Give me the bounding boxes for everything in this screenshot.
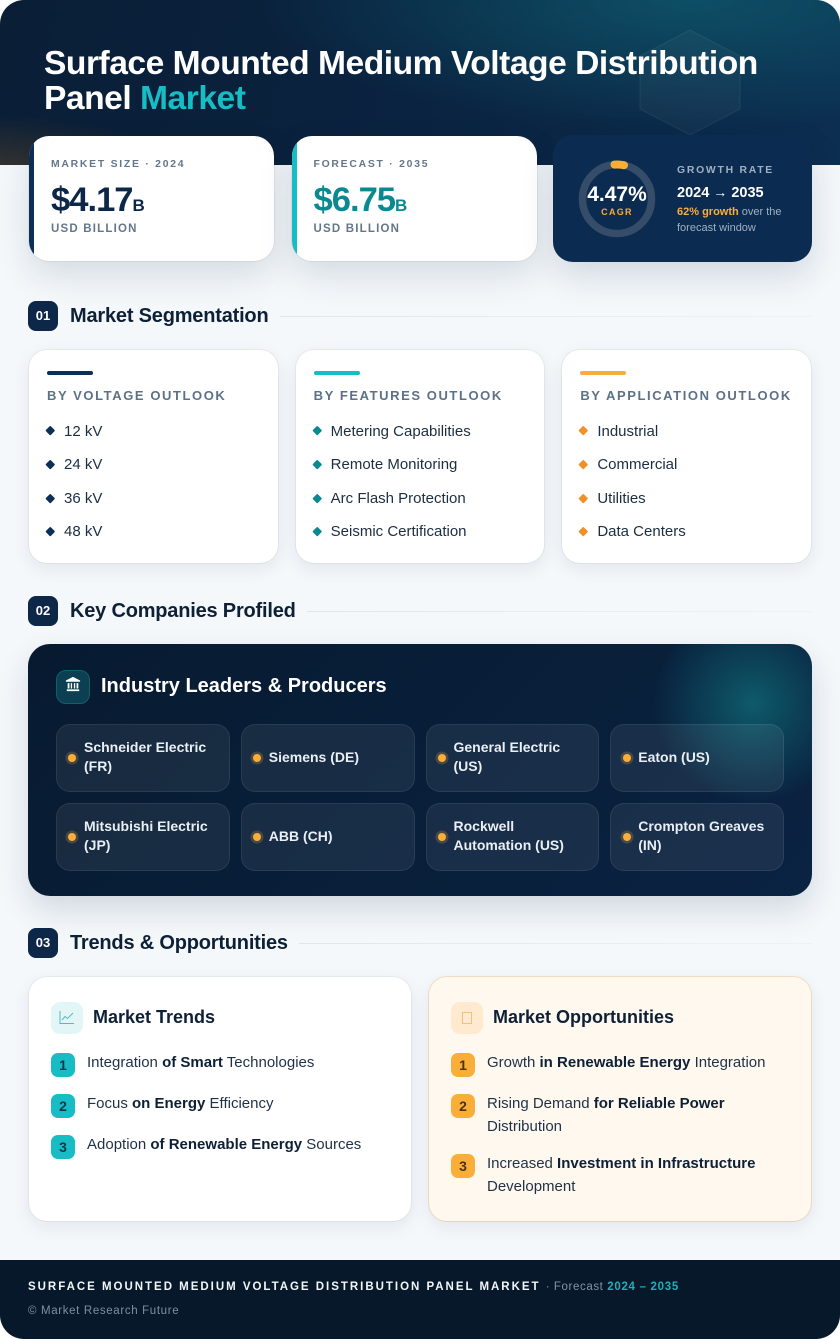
item: Seismic Certification: [331, 523, 467, 540]
CAGR value: 4.47%: [587, 182, 647, 206]
header banner: [0, 0, 840, 165]
company chip: [241, 803, 414, 871]
heading text: Trends & Opportunities: [70, 932, 288, 954]
number badge: 01: [36, 308, 50, 323]
opportunity 3: Increased Investment in Infrastructure: [487, 1155, 755, 1172]
icon: placeholder: [451, 1002, 483, 1034]
value: $6.75B: [314, 181, 407, 219]
KPI card: market size: [28, 136, 274, 261]
company chip: Automation (US): [454, 837, 564, 853]
copyright: © Market Research Future: [28, 1305, 179, 1317]
item: 24 kV: [64, 456, 102, 473]
growth note: 62% growth over the: [677, 206, 782, 218]
accent bar: [28, 136, 34, 261]
decorative hexagon: [640, 30, 740, 135]
number 2: 2: [59, 1098, 67, 1114]
trend 2: Focus on Energy Efficiency: [87, 1095, 273, 1112]
footer: [0, 1260, 840, 1339]
company chip: [426, 724, 599, 792]
number 1: [451, 1053, 475, 1077]
company chip: Rockwell: [454, 818, 514, 834]
company chip: (US): [454, 758, 482, 774]
section 03 heading: [28, 928, 742, 958]
card title: Market Trends: [93, 1007, 215, 1027]
item: Arc Flash Protection: [331, 490, 466, 507]
KPI card: growth rate: [553, 135, 812, 262]
CAGR ring: [578, 160, 656, 238]
card title: Market Opportunities: [493, 1007, 674, 1027]
growth label: GROWTH RATE: [677, 165, 774, 176]
company chip: [56, 803, 230, 871]
panel: features outlook: [296, 350, 544, 563]
panel: market opportunities: [429, 977, 811, 1221]
item: 12 kV: [64, 422, 102, 440]
number badge: [28, 301, 58, 331]
item: 36 kV: [64, 490, 102, 507]
number 2: 2: [459, 1098, 467, 1114]
item: Metering Capabilities: [331, 422, 471, 440]
panel: industry leaders: [28, 644, 812, 896]
heading text: Key Companies Profiled: [70, 600, 296, 622]
number badge: 03: [36, 935, 50, 950]
accent bar: [292, 136, 296, 261]
company chip: [426, 803, 599, 871]
item: Utilities: [597, 490, 646, 507]
company chip: Siemens (DE): [269, 748, 359, 764]
item: Data Centers: [597, 523, 686, 540]
growth note: [677, 206, 782, 234]
section 02 heading: [28, 596, 740, 626]
footer title: SURFACE MOUNTED MEDIUM VOLTAGE DISTRIBUTION PANEL MARKET · Forecast 2024 – 2035: [28, 1281, 679, 1293]
opportunity 3: Development: [487, 1178, 575, 1194]
company chip: Mitsubishi Electric: [84, 818, 208, 834]
company chip: ABB (CH): [269, 828, 333, 844]
KPI card: forecast: [292, 136, 537, 261]
opportunity 2: Rising Demand for Reliable Power: [487, 1095, 725, 1112]
label: MARKET SIZE · 2024: [51, 159, 185, 170]
number 1: [51, 1053, 75, 1077]
icon: line chart: [51, 1002, 83, 1034]
value: $4.17B: [51, 181, 145, 219]
number 1: 1: [59, 1057, 67, 1073]
opportunity 1: Growth in Renewable Energy Integration: [487, 1054, 765, 1071]
CAGR label: CAGR: [601, 207, 633, 217]
company chip: Eaton (US): [638, 748, 710, 764]
icon: institution: [56, 670, 90, 704]
company chip: [56, 724, 230, 792]
company chip: [241, 724, 414, 792]
unit: USD BILLION: [51, 223, 138, 235]
heading text: Market Segmentation: [70, 305, 268, 327]
opportunity 2: Distribution: [487, 1118, 562, 1134]
company chip: (FR): [84, 758, 112, 774]
number badge: [28, 596, 58, 626]
number 2: [51, 1094, 75, 1118]
item: Commercial: [597, 456, 677, 473]
section 01 heading: [28, 301, 740, 331]
panel: market trends: [29, 977, 411, 1221]
panel heading: BY FEATURES OUTLOOK: [314, 388, 503, 403]
company chip: Crompton Greaves: [638, 818, 764, 834]
item: Remote Monitoring: [331, 456, 457, 473]
trend 1: Integration of Smart Technologies: [87, 1054, 314, 1071]
item: 48 kV: [64, 523, 102, 540]
unit: USD BILLION: [314, 223, 400, 235]
number 3: [451, 1154, 475, 1178]
number 2: [451, 1094, 475, 1118]
panel: application outlook: [562, 350, 811, 563]
title: Surface Mounted Medium Voltage Distribution: [44, 45, 758, 82]
number 3: 3: [59, 1139, 67, 1155]
company chip: Schneider Electric: [84, 739, 206, 755]
company chip: [610, 724, 784, 792]
number 1: 1: [459, 1057, 467, 1073]
panel heading: BY APPLICATION OUTLOOK: [580, 388, 792, 403]
opportunity 2: [487, 1095, 725, 1134]
company chip: [610, 803, 784, 871]
company chip: (JP): [84, 837, 110, 853]
growth range: 2024 → 2035: [677, 184, 764, 201]
company chip: General Electric: [454, 739, 560, 755]
opportunity 3: [487, 1155, 755, 1194]
title: Panel Market: [44, 80, 245, 117]
panel heading: BY VOLTAGE OUTLOOK: [47, 388, 226, 403]
number badge: 02: [36, 603, 50, 618]
company chip: (IN): [638, 837, 662, 853]
item: Industrial: [597, 422, 658, 440]
title: [44, 45, 758, 117]
trend 3: Adoption of Renewable Energy Sources: [87, 1136, 361, 1153]
number 3: [51, 1135, 75, 1159]
label: FORECAST · 2035: [314, 159, 429, 170]
growth note: forecast window: [677, 222, 756, 234]
panel: voltage outlook: [29, 350, 278, 563]
number 3: 3: [459, 1158, 467, 1174]
panel title: Industry Leaders & Producers: [101, 675, 387, 697]
number badge: [28, 928, 58, 958]
